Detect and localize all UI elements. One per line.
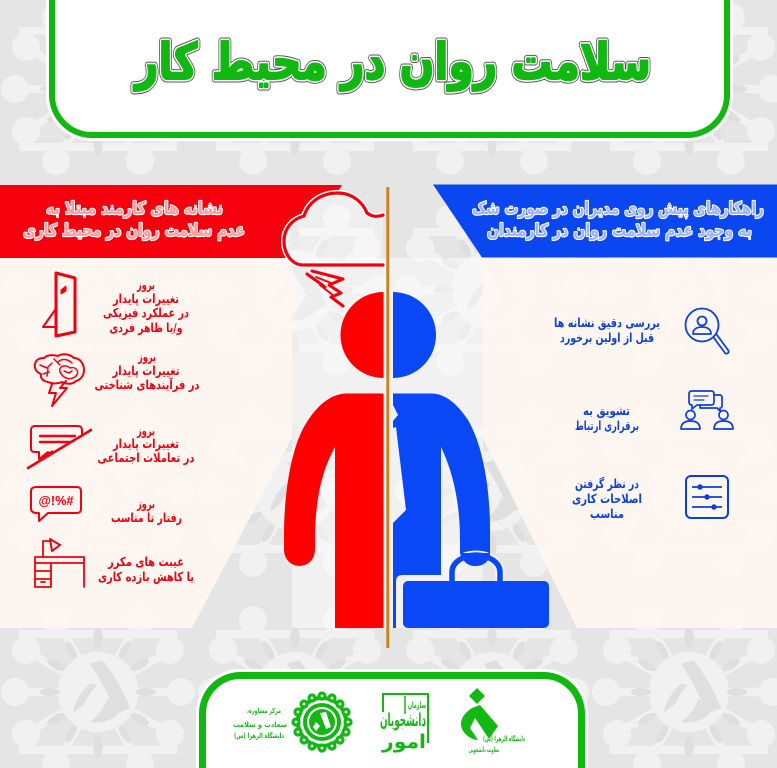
logo text: counselling centre: مرکز مشاوره،: [247, 707, 281, 715]
item: encourage communication: [575, 391, 733, 433]
icon: storm cloud: [284, 193, 383, 306]
text: تغییرات پایدار: [112, 363, 180, 378]
text: و/یا ظاهر فردی: [110, 320, 182, 335]
icon: two people talking: [681, 391, 733, 429]
item: inappropriate behaviour: [31, 487, 182, 525]
text: [98, 554, 194, 584]
text: [103, 277, 189, 335]
icon: crossed speech bubble: [28, 426, 91, 468]
text: مناسب: [590, 506, 624, 521]
logo text: counselling centre: [233, 707, 287, 740]
icon: brain with bolt: [35, 354, 84, 406]
logo: Alzahra University: معاونت دانشجویی: [469, 746, 499, 754]
briefcase: [403, 553, 549, 628]
logo text: counselling centre: سعادت و سلامت: [233, 721, 287, 729]
logo: Alzahra University: [461, 688, 525, 754]
logo text: counselling centre: دانشگاه الزهرا (س): [234, 731, 284, 740]
text: [575, 403, 639, 433]
logo: counselling centre rosette: [293, 693, 351, 751]
title panel: [52, 0, 727, 135]
red banner heading: [23, 199, 245, 241]
text: برقراری ارتباط: [575, 418, 639, 433]
figure: blue half: [393, 292, 549, 628]
logo: Student Affairs Organization: امور: [381, 731, 426, 753]
title: سلامت روان در محیط کار: [133, 33, 651, 92]
icon: desk with lamp: [35, 539, 84, 587]
blue banner heading: [472, 199, 764, 241]
icon: swearing speech bubble: [31, 487, 81, 521]
item: absence: [35, 539, 194, 587]
text: غیبت های مکرر: [107, 554, 184, 569]
logo: Student Affairs Organization: دانشجویان: [380, 710, 426, 731]
red banner heading: عدم سلامت روان در محیط کاری: [23, 221, 245, 241]
icon: sliders panel: [686, 476, 728, 518]
text: [554, 315, 660, 345]
logo: Alzahra University: دانشگاه الزهرا (س): [483, 734, 525, 743]
logo: Student Affairs Organization: [380, 693, 429, 753]
text: تشویق به: [583, 403, 630, 418]
panel: centre backdrop: [292, 258, 483, 628]
title: سلامت روان در محیط کار: [133, 33, 651, 92]
divider line: [386, 187, 389, 648]
item: social change: [28, 423, 194, 468]
text: بروز: [137, 349, 156, 364]
text: [94, 349, 200, 392]
text: بررسی دقیق نشانه ها: [554, 315, 660, 330]
icon: swearing speech bubble: @!%#: [38, 493, 74, 508]
panel: left cream area: [0, 258, 292, 628]
text: تغییرات پایدار: [112, 436, 179, 451]
figure: red half: [284, 292, 384, 628]
title: سلامت روان در محیط کار: [133, 33, 651, 92]
text: [572, 476, 642, 521]
text: در عملکرد فیزیکی: [103, 305, 189, 320]
panel: right cream area: [483, 258, 777, 628]
item: careful review: [554, 308, 729, 354]
text: [98, 423, 194, 465]
text: اصلاحات کاری: [572, 491, 642, 506]
panel: red banner: [0, 185, 342, 258]
icon: magnifier with person: [686, 308, 729, 354]
item: work adjustments: [572, 476, 728, 521]
item: cognitive change: [35, 349, 200, 406]
icon: door: [43, 273, 75, 336]
red banner heading: نشانه های کارمند مبتلا به: [46, 199, 223, 219]
text: تغییرات پایدار: [112, 291, 179, 306]
text: رفتار نا مناسب: [111, 510, 182, 525]
text: در تعاملات اجتماعی: [98, 450, 194, 465]
logo panel: [202, 676, 582, 768]
panel: blue banner: [433, 184, 777, 258]
text: در نظر گرفتن: [575, 476, 639, 491]
text: بروز: [136, 496, 155, 511]
text: بروز: [136, 423, 155, 438]
text: قبل از اولین برخورد: [560, 330, 654, 345]
text: [111, 496, 182, 525]
item: physical change: [43, 273, 189, 336]
text: در فرآیندهای شناختی: [94, 377, 200, 392]
logo: Student Affairs Organization: سازمان: [408, 701, 426, 711]
text: بروز: [136, 277, 155, 292]
text: یا کاهش بازده کاری: [98, 569, 194, 584]
